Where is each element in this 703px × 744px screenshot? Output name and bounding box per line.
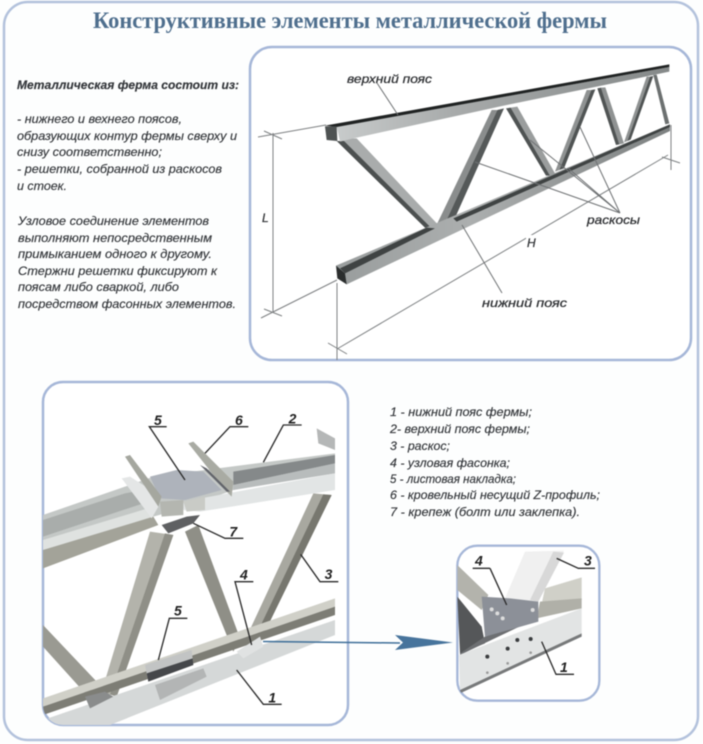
text block: composition of truss: образующих контур фермы сверху и <box>17 131 238 143</box>
legend: 7 - крепеж (болт или заклепка). <box>390 507 580 519</box>
panel: node inset: 3 <box>584 553 592 569</box>
text block: node connection: поясам либо сваркой, либо <box>18 282 180 294</box>
legend: 1 - нижний пояс фермы; <box>390 407 532 419</box>
legend: 6 - кровельный несущий Z-профиль; <box>390 490 600 502</box>
text block: composition of truss <box>17 80 239 193</box>
panel: node inset <box>457 546 599 701</box>
leaders and numbers: 4 <box>239 567 248 583</box>
text block: node connection: выполняют непосредственным <box>18 233 212 245</box>
panel: detail of truss <box>43 382 348 725</box>
text block: composition of truss: - нижнего и вехнего поясов, <box>17 114 182 126</box>
leaders and numbers: 1 <box>268 689 276 705</box>
text block: composition of truss: и стоек. <box>17 181 67 193</box>
text block: node connection: Стержни решетки фиксируют к <box>18 266 218 278</box>
legend: 5 - листовая накладка; <box>390 474 516 486</box>
text block: composition of truss: - решетки, собранной из раскосов <box>17 164 222 176</box>
text block: node connection: примыканием одного к другому. <box>18 249 212 261</box>
label text: H: H <box>527 236 536 250</box>
label: L: L <box>262 211 269 225</box>
leaders and numbers: 3 <box>325 566 333 582</box>
panel: node inset: 1 <box>560 659 568 675</box>
dimension lines <box>258 125 680 360</box>
label: diagonals: раскосы <box>586 213 640 227</box>
arrow <box>263 635 453 650</box>
text block: node connection: посредством фасонных элементов. <box>18 299 236 311</box>
leaders and numbers: 7 <box>229 524 238 540</box>
text block: composition of truss: снизу соответственно; <box>17 147 162 159</box>
text block: composition of truss: Металлическая ферма состоит из: <box>17 80 239 92</box>
leaders and numbers <box>149 410 338 705</box>
label: H <box>526 235 538 248</box>
label: upper chord: верхний пояс <box>347 72 432 86</box>
leaders and numbers: 5 <box>154 412 162 428</box>
text block: node connection: Узловое соединение элементов <box>17 216 209 228</box>
title: Конструктивные элементы металлической фермы <box>93 8 607 33</box>
inset drawing <box>457 551 582 693</box>
truss drawing <box>325 64 670 284</box>
leaders and numbers: 2 <box>288 410 297 426</box>
legend: 4 - узловая фасонка; <box>390 458 510 470</box>
legend <box>389 407 600 519</box>
panel: node inset: 4 <box>474 553 483 569</box>
detail drawing <box>43 428 335 725</box>
text block: node connection <box>17 216 236 311</box>
label: lower chord: нижний пояс <box>482 296 567 310</box>
leaders and numbers: 6 <box>235 412 243 428</box>
legend: 3 - раскос; <box>390 441 450 453</box>
leader lines <box>377 83 620 293</box>
legend: 2- верхний пояс фермы; <box>389 424 530 436</box>
leaders and numbers: 5 <box>174 603 182 619</box>
panel: truss overview <box>250 47 691 360</box>
